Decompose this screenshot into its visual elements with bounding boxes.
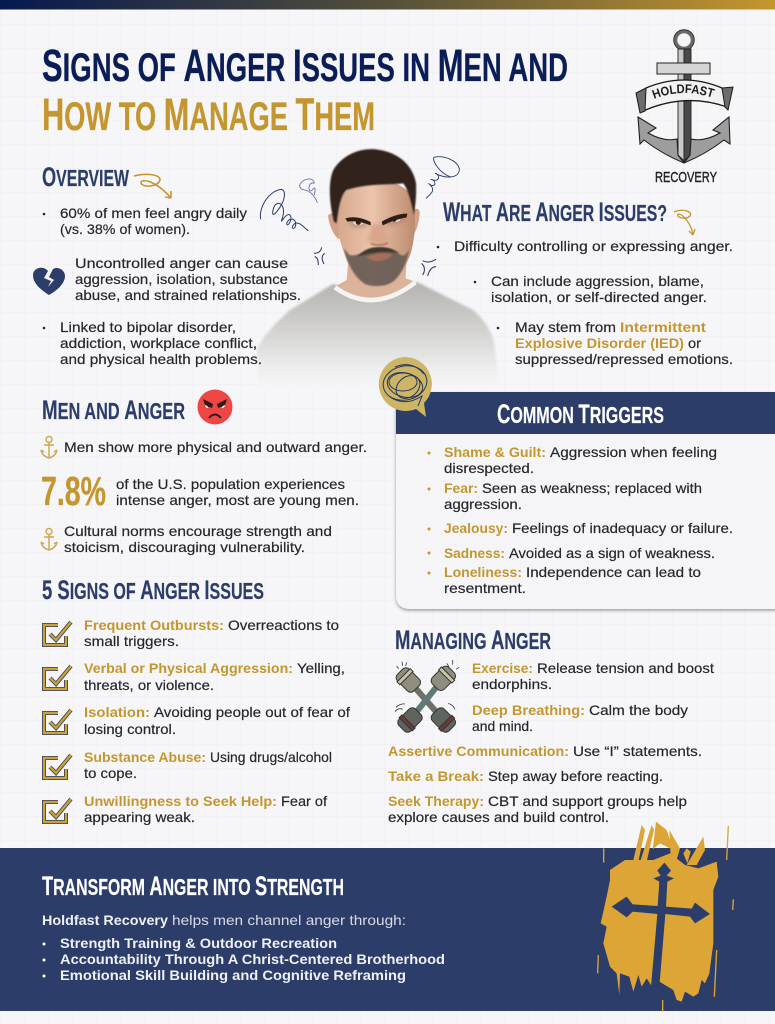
icon: check 2 <box>44 666 71 689</box>
heading: managing anger: MANAGING ANGER <box>395 625 551 655</box>
moustache <box>357 247 399 257</box>
panel: common triggers: Aggression when feeling <box>550 444 717 460</box>
panel: common triggers: Independence can lead to <box>526 564 701 580</box>
managing anger list: Exercise: <box>472 660 533 676</box>
managing anger list: endorphins. <box>472 676 552 692</box>
eye sockets <box>348 217 407 228</box>
what are anger issues bullets: Explosive Disorder (IED) <box>515 335 684 351</box>
men and anger stats: Cultural norms encourage strength and <box>64 523 332 539</box>
icon: crossed dumbbells <box>393 660 459 735</box>
panel: common triggers: Jealousy: <box>444 520 508 536</box>
signs list: Avoiding people out of fear of <box>154 704 350 720</box>
heading: men and anger: MEN AND ANGER <box>42 395 185 425</box>
managing anger list: Deep Breathing: <box>472 702 585 718</box>
signs list: threats, or violence. <box>84 677 214 693</box>
icon: check 4 <box>44 755 71 778</box>
signs list: Unwillingness to Seek Help: <box>84 793 277 809</box>
icon: broken heart <box>33 268 65 295</box>
overview bullets: abuse, and strained relationships. <box>75 287 301 303</box>
ears <box>328 209 420 239</box>
signs list: Isolation: <box>84 704 150 720</box>
heading: overview: OVERVIEW <box>42 162 130 192</box>
logo: Holdfast Recovery anchor: HOLDFAST <box>652 84 715 99</box>
panel: common triggers: COMMON TRIGGERS <box>497 399 664 429</box>
managing anger list: explore causes and build control. <box>388 809 609 825</box>
signs list: Yelling, <box>297 660 345 676</box>
men and anger stats: Men show more physical and outward anger. <box>64 439 367 455</box>
men and anger stats: intense anger, most are young men. <box>116 492 359 508</box>
mouth <box>366 253 393 261</box>
signs list: Using drugs/alcohol <box>210 749 332 765</box>
panel: common triggers: Sadness: <box>444 545 505 561</box>
panel: common triggers: resentment. <box>444 580 526 596</box>
signs list <box>44 617 350 825</box>
title <box>42 40 568 140</box>
icon: squiggle arrow what <box>674 210 695 235</box>
panel: common triggers: Avoided as a sign of weakness. <box>509 545 715 561</box>
icon: anchor <box>41 436 57 458</box>
heading: what are anger issues: WHAT ARE ANGER ISSUES? <box>443 197 667 227</box>
men and anger stats: of the U.S. population experiences <box>116 476 345 492</box>
shirt <box>257 282 500 390</box>
panel: common triggers: Loneliness: <box>444 564 522 580</box>
signs list: small triggers. <box>84 633 179 649</box>
what are anger issues bullets: Difficulty controlling or expressing anger. <box>454 238 733 254</box>
what are anger issues bullets: isolation, or self-directed anger. <box>491 289 707 305</box>
what are anger issues bullets: Can include aggression, blame, <box>491 273 704 289</box>
signs list: Frequent Outbursts: <box>84 617 224 633</box>
hair <box>330 149 416 223</box>
what are anger issues bullets: or <box>688 335 701 351</box>
managing anger list: CBT and support groups help <box>488 793 687 809</box>
beard <box>344 247 409 286</box>
men and anger stats <box>41 436 367 555</box>
panel: common triggers <box>396 392 775 609</box>
what are anger issues bullets: suppressed/repressed emotions. <box>515 351 733 367</box>
what are anger issues bullets: May stem from <box>515 319 616 335</box>
icon: check 1 <box>44 622 71 645</box>
overview bullets: 60% of men feel angry daily <box>60 205 247 221</box>
overview bullets: Uncontrolled anger can cause <box>75 255 288 271</box>
top gradient bar <box>0 0 775 10</box>
title: SIGNS OF ANGER ISSUES IN MEN AND <box>42 40 568 91</box>
panel: footer band: Holdfast Recovery <box>42 912 168 928</box>
icon: anchor <box>41 528 57 550</box>
logo: Holdfast Recovery anchor <box>635 29 734 186</box>
scribble: right top <box>426 157 459 198</box>
signs list: appearing weak. <box>84 809 195 825</box>
eyes <box>353 220 364 225</box>
scribble: small upper <box>300 179 317 203</box>
icon: speech bubble scribble <box>379 357 432 417</box>
men and anger stats: stoicism, discouraging vulnerability. <box>64 539 305 555</box>
icon: angry emoji <box>198 390 232 424</box>
title: HOW TO MANAGE THEM <box>42 89 375 140</box>
panel: common triggers: Shame & Guilt: <box>444 444 546 460</box>
managing anger list: and mind. <box>472 718 533 734</box>
signs list: Overreactions to <box>228 617 339 633</box>
managing anger list: Assertive Communication: <box>388 743 569 759</box>
nose <box>367 223 391 244</box>
icon: check 5 <box>44 799 71 822</box>
face <box>337 180 415 287</box>
overview bullets: Linked to bipolar disorder, <box>60 319 236 335</box>
panel: common triggers: Seen as weakness; replaced with <box>482 480 702 496</box>
signs list: to cope. <box>84 765 137 781</box>
icon: check 3 <box>44 710 71 733</box>
heading: transform anger: TRANSFORM ANGER INTO STRENGTH <box>42 871 344 901</box>
panel: common triggers: Fear: <box>444 480 478 496</box>
what are anger issues bullets <box>437 238 733 367</box>
heading: 5 signs: 5 SIGNS OF ANGER ISSUES <box>42 575 264 605</box>
signs list: Fear of <box>281 793 327 809</box>
managing anger list: Calm the body <box>589 702 688 718</box>
panel: common triggers: aggression. <box>444 496 522 512</box>
signs list: Verbal or Physical Aggression: <box>84 660 293 676</box>
brows <box>345 214 407 225</box>
logo: Holdfast Recovery anchor: RECOVERY <box>655 169 717 186</box>
overview bullets: (vs. 38% of women). <box>60 221 190 237</box>
anger marks right <box>422 259 436 276</box>
overview bullets: addiction, workplace conflict, <box>60 335 257 351</box>
panel: footer band: helps men channel anger through: <box>172 912 406 928</box>
panel: footer band: Emotional Skill Building and Cognitive Reframing <box>60 967 406 983</box>
icon: squiggle arrow overview <box>134 174 171 198</box>
panel: common triggers: Feelings of inadequacy or failure. <box>512 520 733 536</box>
what are anger issues bullets: Intermittent <box>620 319 706 335</box>
icon: brush cross <box>598 822 733 1012</box>
panel: footer band: Accountability Through A Christ-Centered Brotherhood <box>60 951 445 967</box>
photo: angry man <box>257 149 500 390</box>
signs list: losing control. <box>84 721 176 737</box>
managing anger list: Use “I” statements. <box>573 743 702 759</box>
panel: footer band <box>0 848 775 1011</box>
panel: common triggers: disrespected. <box>444 460 534 476</box>
overview bullets <box>33 205 301 367</box>
managing anger list: Release tension and boost <box>537 660 714 676</box>
panel: footer band: Strength Training & Outdoor Recreation <box>60 935 337 951</box>
signs list: Substance Abuse: <box>84 749 206 765</box>
men and anger stats: 7.8% <box>41 468 106 514</box>
managing anger list: Seek Therapy: <box>388 793 484 809</box>
overview bullets: and physical health problems. <box>60 351 262 367</box>
managing anger list: Take a Break: <box>388 768 484 784</box>
managing anger list <box>388 660 714 825</box>
anger marks left <box>314 247 325 265</box>
scribble: left large <box>260 189 308 231</box>
overview bullets: aggression, isolation, substance <box>75 271 288 287</box>
neck <box>335 260 415 299</box>
collar <box>335 282 415 300</box>
managing anger list: Step away before reacting. <box>488 768 663 784</box>
